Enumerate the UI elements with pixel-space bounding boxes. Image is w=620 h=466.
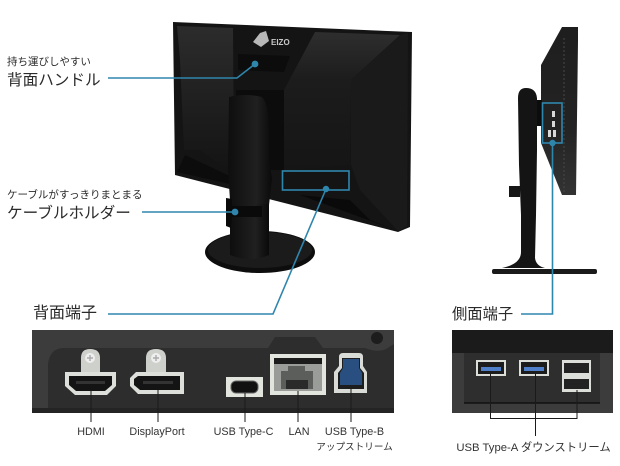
stand base <box>205 231 315 273</box>
heading: side ports: 側面端子 <box>452 306 513 323</box>
side foot <box>492 269 597 274</box>
label: cable holder: ケーブルホルダー <box>7 203 131 222</box>
USB-A port 1 <box>476 360 506 376</box>
label: cable holder: ケーブルがすっきりまとまる <box>7 188 142 201</box>
monitor side profile <box>541 27 578 195</box>
EIZO logo <box>253 31 290 47</box>
leader line: USB-A <box>534 374 536 436</box>
connector lines <box>490 374 577 418</box>
panel: side ports <box>452 330 613 418</box>
port labels: rear: USB Type-B <box>325 426 384 438</box>
rear handle <box>238 54 290 72</box>
USB Type-C port <box>226 377 263 422</box>
label: rear handle: 背面ハンドル <box>7 71 101 89</box>
callout line: rear handle <box>108 61 258 78</box>
USB Type-B port <box>334 353 367 422</box>
DisplayPort port <box>130 349 184 422</box>
port label: USB-A: USB Type-A ダウンストリーム <box>456 440 611 454</box>
callout line: side ports <box>521 103 562 314</box>
EIZO logo: EIZO <box>271 38 290 47</box>
USB-A port 2 <box>519 360 549 376</box>
port labels: rear: USB Type-C <box>214 426 274 438</box>
port labels: rear: HDMI <box>77 426 105 438</box>
side ports <box>548 111 556 137</box>
panel: rear ports <box>32 330 394 422</box>
side monitor illustration <box>492 27 597 274</box>
label: cable holder <box>7 188 142 222</box>
LAN port <box>270 354 326 422</box>
screw <box>371 332 383 344</box>
USB-A stacked ports <box>562 360 591 392</box>
port labels: rear: LAN <box>288 426 310 438</box>
label: rear handle: 持ち運びしやすい <box>7 55 91 68</box>
stand <box>228 95 272 255</box>
port labels: rear: DisplayPort <box>129 426 185 438</box>
callout line: rear ports <box>108 171 349 314</box>
side holder tab <box>509 186 520 197</box>
cable holder <box>226 198 262 228</box>
port labels: rear <box>77 426 393 453</box>
HDMI port <box>65 349 116 422</box>
callout line: cable holder <box>142 209 238 215</box>
label: rear handle <box>7 55 101 89</box>
port labels: rear: アップストリーム <box>316 442 393 453</box>
heading: rear ports: 背面端子 <box>33 304 97 322</box>
monitor rear shell <box>173 22 412 232</box>
side stand <box>502 88 545 268</box>
rear monitor illustration <box>173 22 412 273</box>
